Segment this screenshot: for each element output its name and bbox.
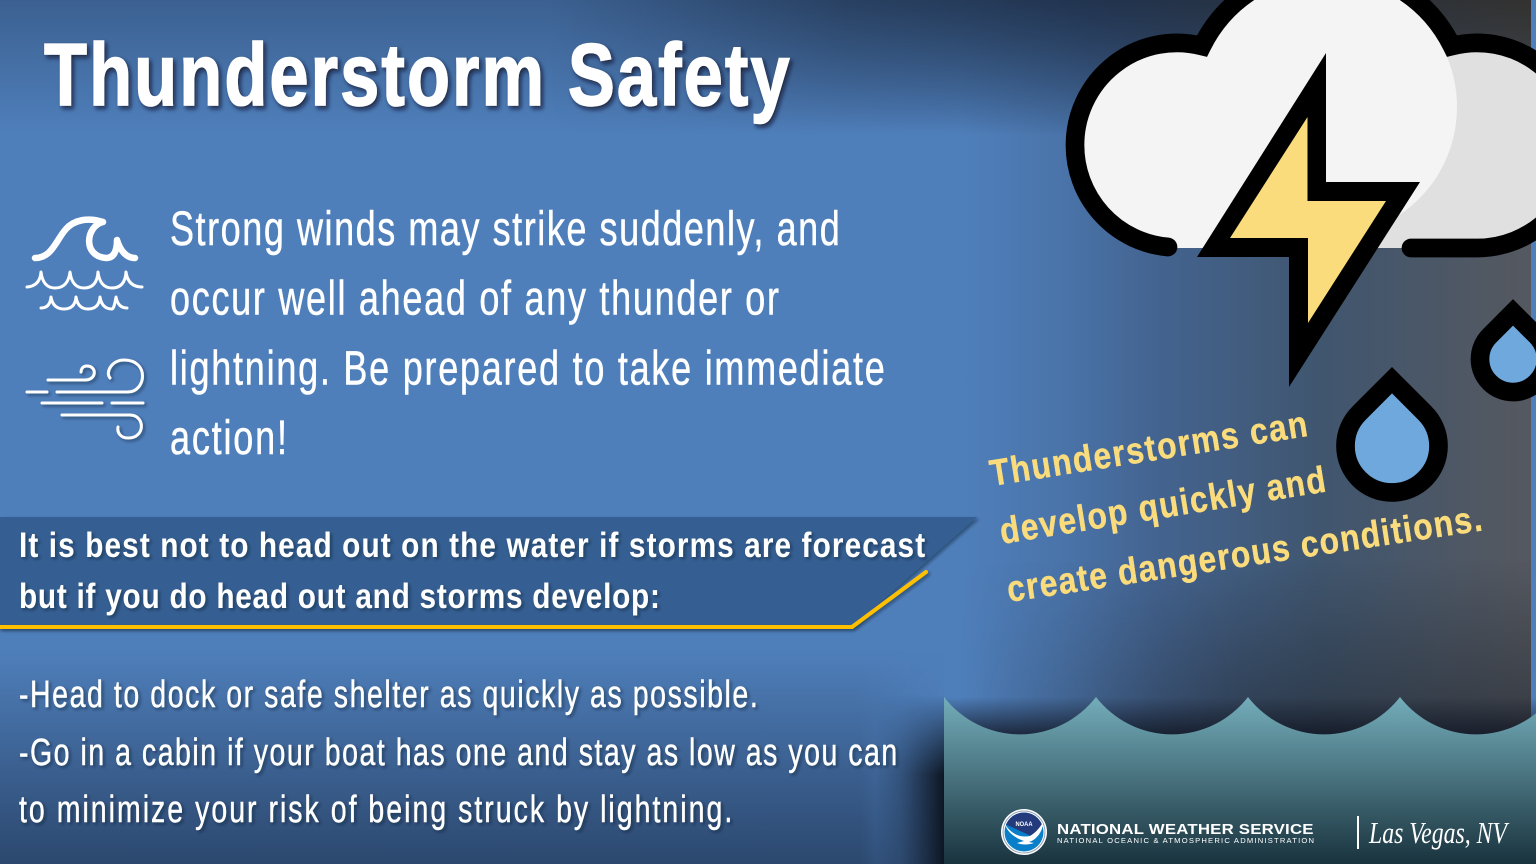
water panel with scalloped storm edge — [944, 697, 1536, 864]
icon: wind — [27, 360, 143, 438]
text block: safety actions — [19, 674, 897, 831]
text block: strong winds warning: action! — [170, 411, 287, 464]
text block: safety actions: -Go in a cabin if your boat has one and stay as low as you can — [19, 732, 897, 774]
text block: safety actions: -Head to dock or safe shelter as quickly as possible. — [19, 674, 758, 716]
agency wordmark: NATIONAL WEATHER SERVICE — [1057, 822, 1313, 838]
icon: ocean wave — [27, 220, 142, 309]
agency wordmark — [1057, 822, 1314, 845]
icon: small rain drop — [1480, 312, 1536, 392]
icon: large rain drop — [1346, 380, 1439, 492]
title: Thunderstorm Safety — [44, 25, 790, 124]
text block: strong winds warning: occur well ahead of any thunder or — [170, 272, 779, 325]
icon: storm cloud — [1075, 0, 1536, 248]
icon: NOAA logo — [1001, 809, 1047, 855]
callout: thunderstorms develop quickly — [987, 404, 1485, 610]
callout: thunderstorms develop quickly: develop quickly and — [997, 460, 1329, 552]
text block: strong winds warning — [170, 202, 885, 464]
text block: strong winds warning: lightning. Be prepared to take immediate — [170, 342, 885, 395]
text block: safety actions: to minimize your risk of being struck by lightning. — [19, 789, 732, 831]
agency wordmark: NATIONAL OCEANIC & ATMOSPHERIC ADMINISTRATION — [1057, 836, 1314, 845]
banner: advice callout: but if you do head out and storms develop: — [19, 577, 660, 616]
banner: advice callout — [0, 517, 977, 627]
callout: thunderstorms develop quickly: Thunderstorms can — [987, 404, 1310, 494]
callout: thunderstorms develop quickly: create dangerous conditions. — [1004, 498, 1485, 610]
icon: lightning bolt — [1197, 53, 1420, 387]
banner: advice callout: It is best not to head out on the water if storms are forecast — [19, 526, 925, 565]
text block: strong winds warning: Strong winds may strike suddenly, and — [170, 202, 840, 255]
icon: NOAA logo: NOAA — [1016, 821, 1033, 828]
